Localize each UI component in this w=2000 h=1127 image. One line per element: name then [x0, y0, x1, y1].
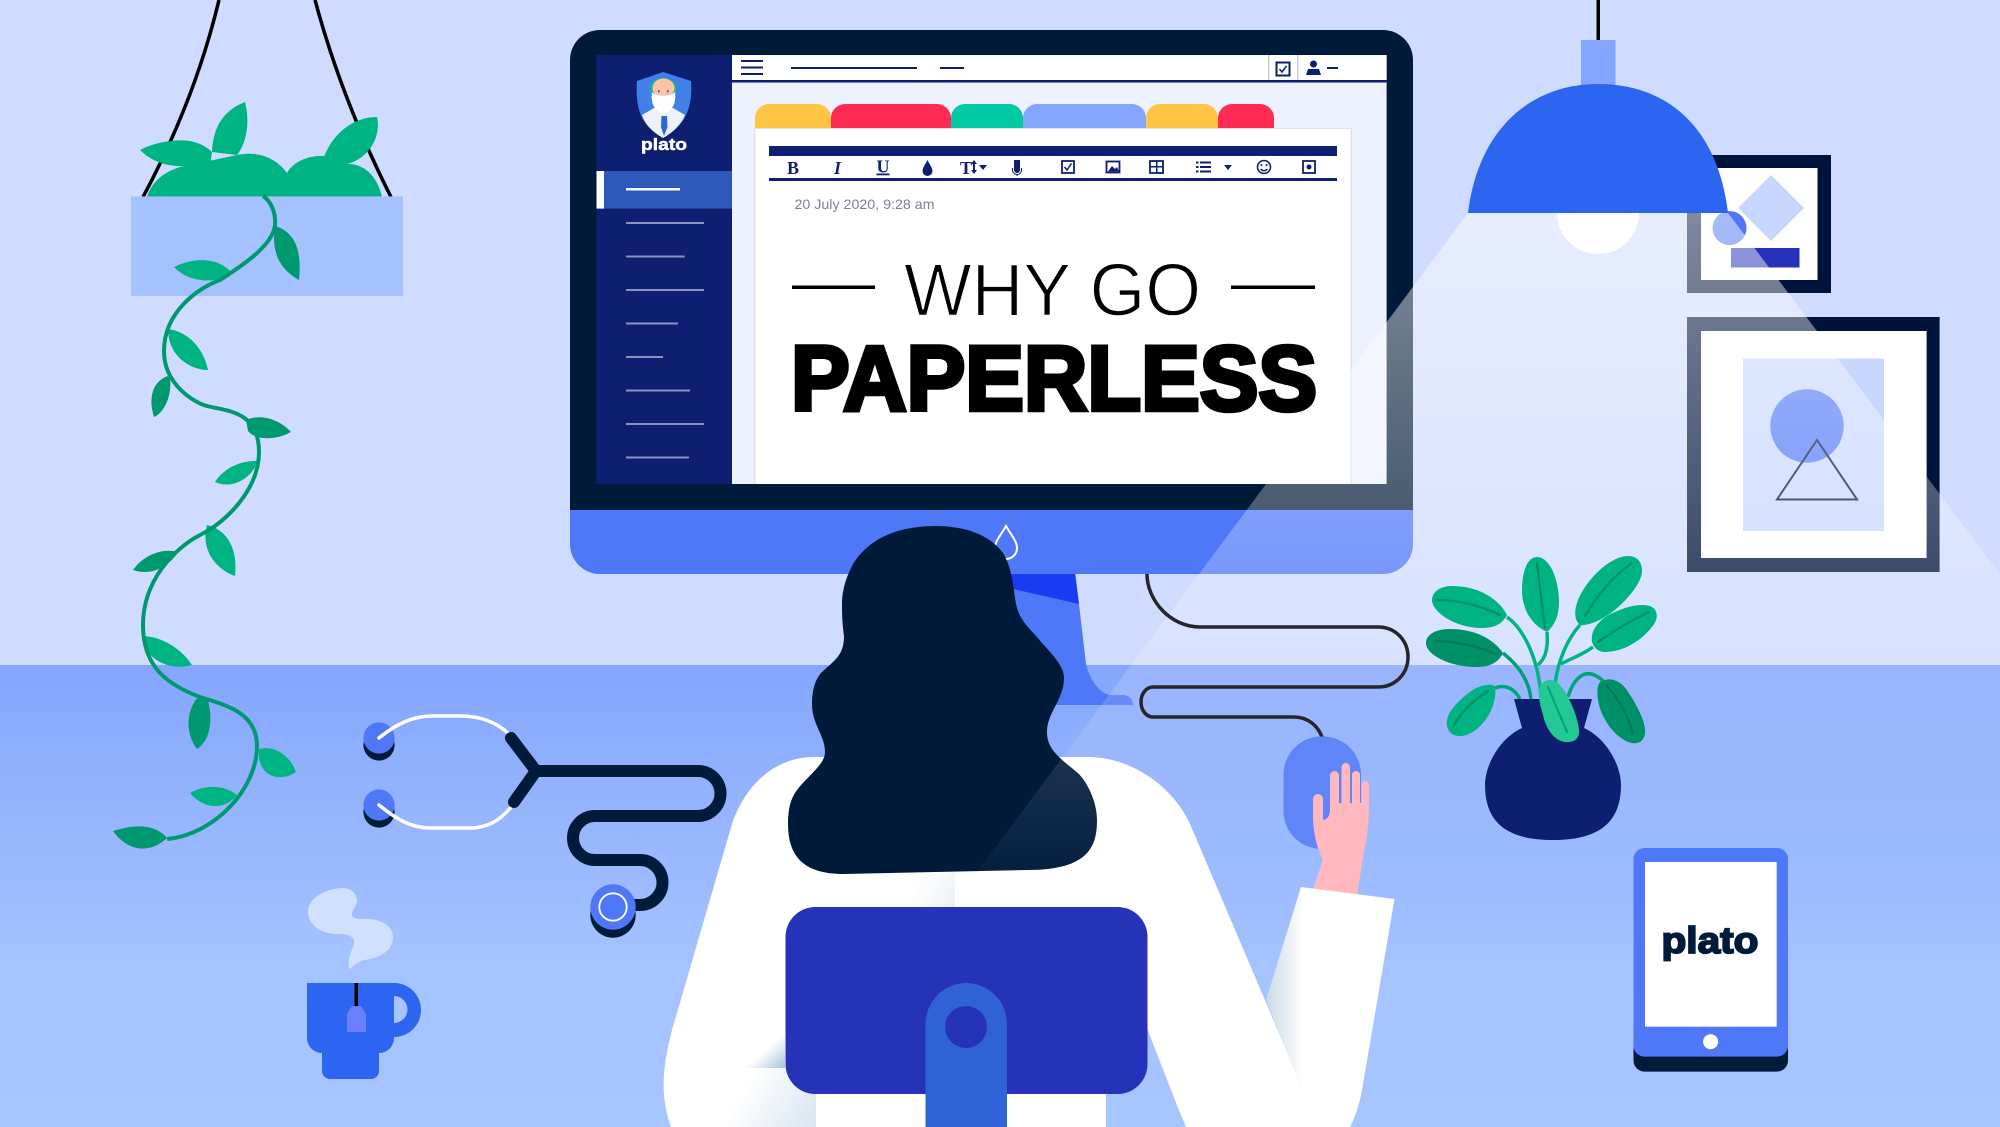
lamp light cone: [787, 213, 2000, 1127]
plant stems: [1495, 617, 1603, 699]
vine leaves: [145, 260, 296, 806]
leaf right: [1592, 605, 1657, 652]
table icon: [1150, 161, 1163, 173]
title: why go paperless: PAPERLESS: [791, 328, 1317, 430]
back shading: [905, 872, 955, 908]
hanging planter: [131, 0, 403, 296]
chest piece: [590, 884, 636, 938]
small framed picture: [1687, 155, 1831, 293]
bold icon: B: [787, 158, 799, 178]
light bulb: [1557, 172, 1639, 254]
large framed picture: [1687, 317, 1940, 572]
title: why go paperless: [791, 248, 1317, 430]
vase: [1485, 699, 1621, 840]
stethoscope: [363, 716, 721, 938]
leaf lower left: [1447, 685, 1495, 736]
leaf lower right dark: [1597, 679, 1645, 743]
chair post hole: [945, 1006, 987, 1048]
foliage top: [140, 102, 382, 197]
potted plant: [1426, 556, 1657, 840]
editor toolbar: [769, 146, 1337, 181]
coat sleeve forearm: [1266, 887, 1394, 1127]
earpieces: [363, 722, 395, 828]
vine stem: [143, 196, 275, 839]
checkbox icon: [1276, 62, 1290, 76]
left sleeve shading: [720, 1069, 816, 1127]
leaf front: [1539, 680, 1579, 742]
monitor: [570, 30, 1413, 705]
lamp cord: [1596, 0, 1600, 42]
text size arrows: [971, 160, 977, 174]
coffee mug: [307, 983, 421, 1079]
mug body: [307, 983, 394, 1079]
monitor drop logo: [995, 526, 1017, 559]
planter box: [131, 196, 403, 296]
top bar: [732, 55, 1387, 82]
paper sheet: [754, 128, 1352, 484]
record icon: [1303, 161, 1315, 173]
pendant lamp: [1468, 0, 1728, 254]
chair post: [926, 983, 1007, 1127]
list icon: [1196, 162, 1211, 172]
list caret: [1224, 165, 1232, 170]
monitor cable: [1141, 574, 1408, 737]
italic icon: I: [833, 158, 842, 178]
title: why go paperless: WHY GO: [904, 248, 1201, 332]
leaf upper right: [1575, 556, 1642, 625]
desk surface: [0, 665, 2000, 1127]
plant leaves: [1426, 556, 1657, 743]
lamp shade: [1468, 84, 1728, 213]
image icon: [1106, 162, 1120, 172]
microphone icon: [1012, 160, 1022, 176]
steam: [308, 888, 393, 969]
left arm shading: [743, 1020, 785, 1068]
smile icon: [1258, 160, 1270, 174]
user icon: [1306, 60, 1338, 75]
computer mouse: [1284, 736, 1361, 849]
ear tubes: [379, 716, 510, 738]
plato logo shield: [637, 72, 691, 138]
hand on mouse: [1312, 763, 1369, 896]
chair: [786, 907, 1148, 1127]
hair: [788, 526, 1097, 874]
caret: [979, 165, 987, 170]
lamp socket: [1581, 40, 1616, 86]
leaf: [1432, 586, 1507, 628]
person: white coat body: [664, 757, 1350, 1127]
task icon: [1062, 161, 1074, 173]
main tube: [511, 738, 721, 905]
monitor chin: [570, 480, 1413, 574]
tea tag: [347, 1006, 366, 1032]
text size icon: T: [960, 158, 972, 178]
tablet: [1634, 848, 1788, 1072]
active menu item: [596, 171, 732, 209]
hamburger icon: [741, 60, 763, 75]
screen app content: [596, 55, 1387, 484]
content background: [731, 55, 1387, 484]
document tabs: [755, 104, 1274, 129]
monitor stand shadow: [1000, 574, 1079, 604]
date stamp: 20 July 2020, 9:28 am: [794, 196, 934, 212]
mug handle: [394, 983, 421, 1037]
monitor bezel: [570, 30, 1413, 510]
menu items: [626, 222, 704, 458]
trailing vine: [113, 196, 300, 849]
planter ropes: [143, 0, 391, 197]
underline icon: U: [876, 156, 890, 176]
plato logo wordmark: plato: [641, 135, 687, 154]
wall background: [0, 0, 2000, 665]
ink drop icon: [922, 160, 932, 176]
leaf dark: [1426, 629, 1503, 667]
tablet plato wordmark: plato: [1662, 920, 1758, 961]
monitor stand: [1000, 570, 1133, 705]
sidebar: [596, 55, 732, 484]
leaf top: [1522, 557, 1559, 632]
tea string: [354, 983, 358, 1008]
